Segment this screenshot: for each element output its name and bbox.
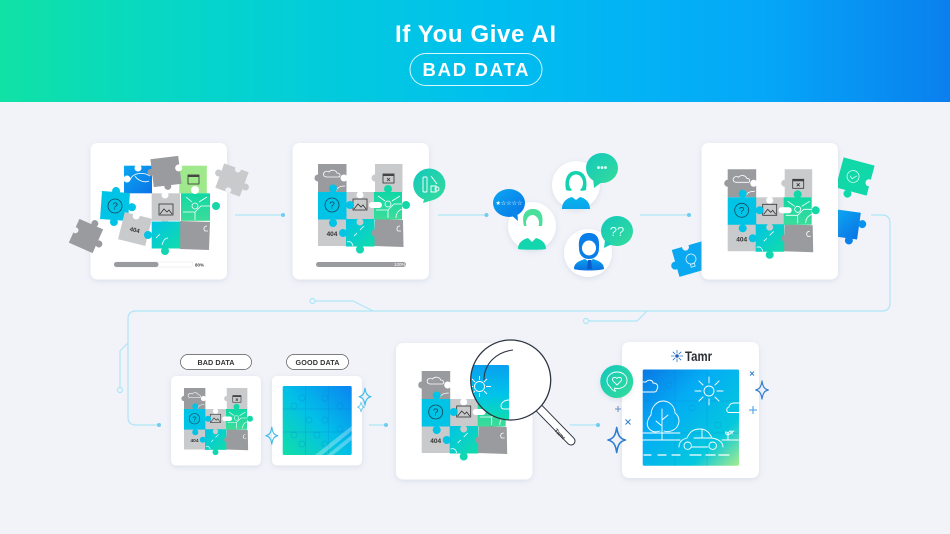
Tamr logo: Tamr bbox=[685, 349, 713, 364]
flow connector lines bbox=[118, 213, 890, 427]
piece: blue bbox=[832, 209, 868, 246]
panel: assembled puzzle 100% bbox=[292, 143, 429, 280]
puzzle assembled: ? bbox=[433, 408, 439, 418]
puzzle assembled: 404 bbox=[430, 438, 442, 445]
puzzle assembled bbox=[418, 371, 514, 460]
piece: blue bbox=[124, 164, 152, 193]
sparkles around Tamr panel bbox=[608, 372, 768, 452]
piece: green bbox=[181, 187, 220, 221]
puzzle assembled small: 404 bbox=[190, 438, 199, 444]
icon: magnifying glass bbox=[465, 340, 571, 442]
piece: lime window bbox=[179, 166, 207, 194]
progress bar: 80% bbox=[195, 262, 204, 268]
piece: question mark: ? bbox=[112, 201, 119, 213]
puzzle assembled: ? bbox=[739, 206, 745, 217]
speech bubble: chart bbox=[413, 168, 445, 203]
panel: assembled puzzle with extra pieces bbox=[702, 143, 838, 280]
pill label: good data bbox=[286, 354, 348, 370]
sparkles around good data bbox=[266, 388, 371, 444]
panel: bad data puzzle bbox=[171, 376, 261, 466]
piece: 404 rotated: 404 bbox=[129, 227, 141, 235]
piece: question mark bbox=[100, 186, 137, 227]
piece: loose top right bbox=[210, 160, 255, 199]
piece: green check bbox=[834, 157, 877, 203]
pill label: bad data: BAD DATA bbox=[198, 358, 234, 367]
header banner bbox=[0, 0, 950, 102]
pill label: good data: GOOD DATA bbox=[296, 358, 340, 367]
puzzle assembled bbox=[314, 164, 410, 254]
puzzle assembled bbox=[724, 169, 820, 259]
panel: clean Tamr picture bbox=[622, 342, 759, 478]
piece: teal bottom bbox=[144, 222, 180, 255]
puzzle assembled: 404 bbox=[327, 231, 338, 238]
puzzle assembled small: ? bbox=[192, 414, 197, 423]
panel: scattered puzzle 80% bbox=[67, 143, 255, 280]
person: bearded man with question: ?? bbox=[610, 224, 624, 239]
piece: image bbox=[152, 192, 189, 224]
badge: bad data: BAD DATA bbox=[422, 59, 528, 80]
badge: bad data bbox=[410, 54, 542, 86]
piece: gray rotated bbox=[146, 156, 185, 192]
solved puzzle square bbox=[283, 386, 352, 455]
panel: good data puzzle bbox=[272, 376, 362, 466]
icon: heart bubble bbox=[600, 365, 633, 398]
piece: gray bottom right bbox=[180, 221, 210, 250]
loose puzzle pieces around panel bbox=[666, 157, 877, 278]
person: woman with ellipsis: ••• bbox=[597, 163, 608, 174]
people discussing bbox=[493, 153, 633, 277]
progress bar bbox=[114, 262, 204, 268]
puzzle assembled: 404 bbox=[736, 236, 748, 243]
piece: 404 rotated bbox=[118, 210, 153, 246]
picture: landscape with car bbox=[643, 370, 739, 466]
title: If You Give AI bbox=[395, 21, 556, 48]
piece: loose bottom left bbox=[67, 213, 110, 255]
progress bar: 100% bbox=[394, 262, 406, 267]
panel: magnifier inspection bbox=[396, 343, 532, 480]
person: agent with rating: ★☆☆☆☆ bbox=[496, 200, 522, 207]
handle: Tamr bbox=[553, 428, 567, 442]
piece: bulb bbox=[666, 239, 710, 278]
puzzle assembled small bbox=[181, 388, 253, 455]
pill label: bad data bbox=[180, 354, 252, 370]
puzzle assembled: ? bbox=[329, 200, 335, 212]
